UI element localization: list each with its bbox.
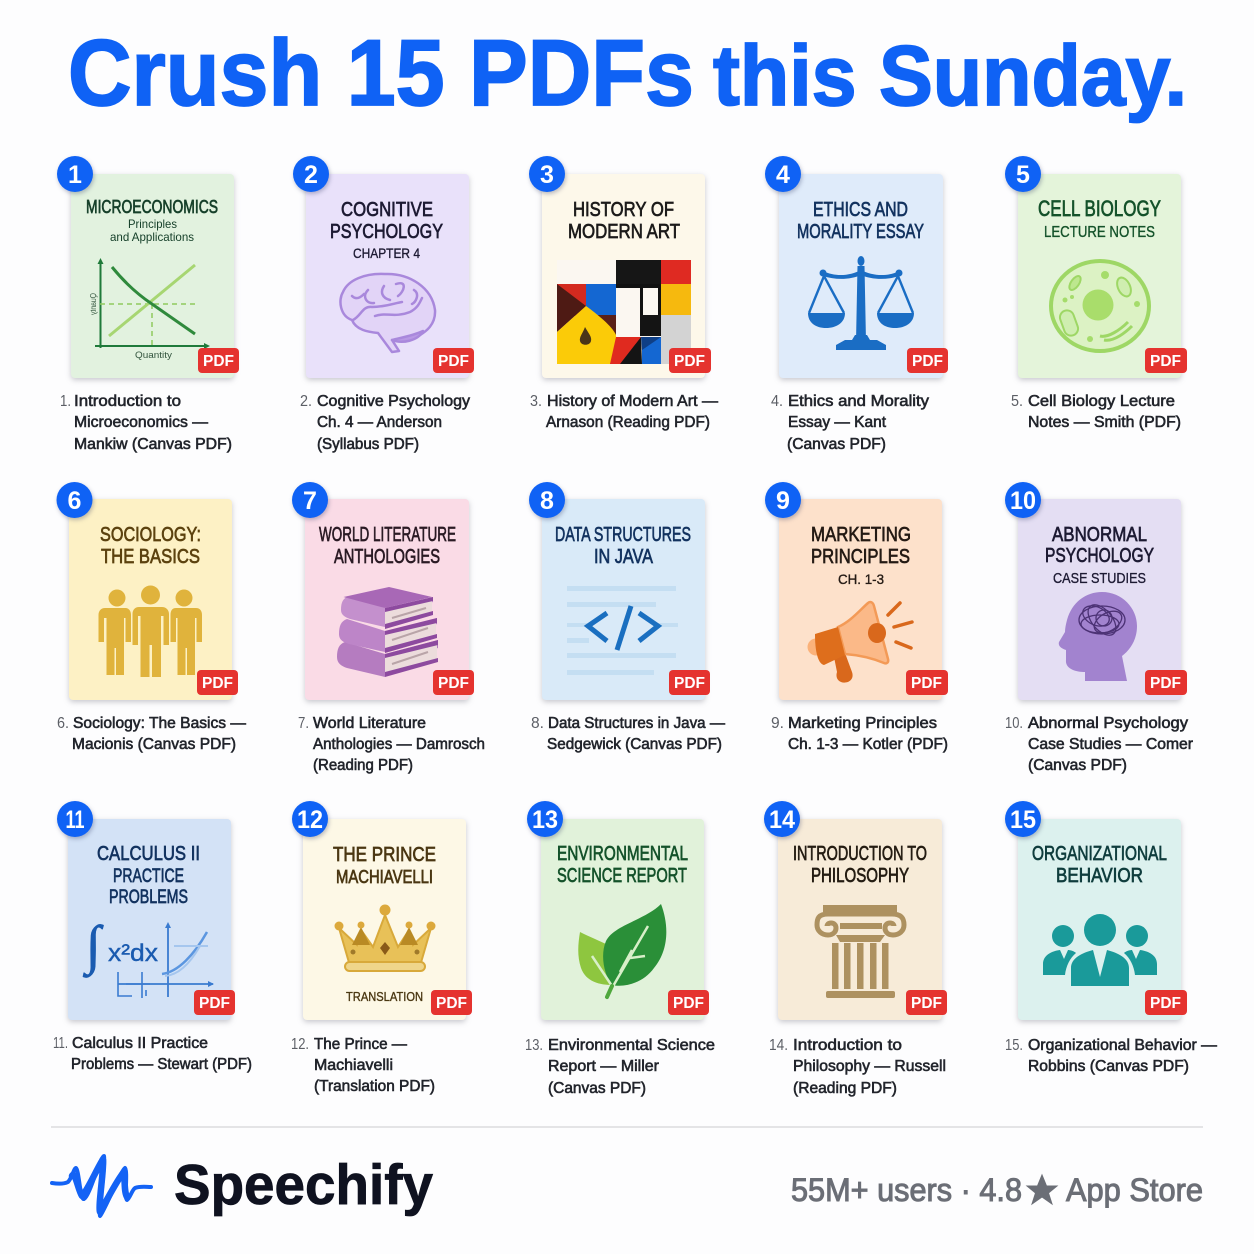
cover title: DATA STRUCTURES: [555, 523, 691, 546]
title: this Sunday.: [713, 29, 1187, 124]
card 2: cognitive psychology: [293, 156, 474, 453]
caption: 7.: [298, 715, 309, 732]
number badge: [529, 156, 565, 192]
caption: (Reading PDF): [313, 757, 413, 774]
caption: Mankiw (Canvas PDF): [74, 436, 232, 453]
caption: [57, 715, 246, 753]
number badge: [765, 156, 801, 192]
caption: Cell Biology Lecture: [1028, 393, 1175, 410]
cover title: BEHAVIOR: [1056, 864, 1143, 887]
icon: scales of justice: [808, 256, 914, 350]
caption: [769, 1037, 946, 1097]
number badge: [1005, 156, 1041, 192]
pdf tag: [906, 670, 948, 695]
pdf tag: PDF: [673, 995, 704, 1012]
number badge: 8: [540, 487, 554, 515]
cover: [71, 174, 234, 378]
caption: 10.: [1005, 715, 1023, 732]
cover title: [555, 523, 691, 568]
caption: [1005, 1037, 1217, 1075]
icon: calculus formula and graph: [83, 915, 214, 998]
cover title: MODERN ART: [568, 220, 680, 243]
cover: [69, 499, 232, 700]
caption: 14.: [769, 1037, 788, 1054]
icon: team of people: [1043, 914, 1157, 986]
card 14: introduction to philosophy: [764, 801, 947, 1097]
number badge: 2: [304, 161, 318, 189]
number badge: [1005, 801, 1041, 837]
cover title: THE PRINCE: [333, 843, 436, 866]
icon: supply and demand chart: Quantity: [135, 350, 172, 361]
caption: [1011, 393, 1181, 431]
icon: brain: [340, 274, 435, 352]
cover: [1018, 819, 1181, 1020]
icon: calculus formula and graph: x²dx: [108, 940, 158, 967]
pdf tag: [198, 348, 239, 373]
caption: 13.: [525, 1037, 543, 1054]
caption: 2.: [300, 393, 312, 410]
card 15: organizational behavior: [1005, 801, 1217, 1075]
cover title: [1045, 523, 1154, 587]
caption: 11.: [53, 1035, 68, 1052]
footer stats: App Store: [1066, 1172, 1203, 1208]
caption: [771, 393, 929, 453]
caption: Machiavelli: [314, 1057, 393, 1074]
pdf tag: [1145, 348, 1187, 373]
caption: Sedgewick (Canvas PDF): [547, 736, 722, 753]
caption: Notes — Smith (PDF): [1028, 414, 1181, 431]
caption: 5.: [1011, 393, 1023, 410]
caption: Ch. 4 — Anderson: [317, 414, 442, 431]
caption: Introduction to: [793, 1037, 902, 1054]
caption: Ch. 1-3 — Kotler (PDF): [788, 736, 948, 753]
cover title: COGNITIVE: [341, 198, 433, 221]
caption: Report — Miller: [548, 1058, 660, 1075]
cover: [779, 174, 943, 378]
icon: three people: [98, 586, 202, 677]
number badge: [764, 801, 800, 837]
caption: Robbins (Canvas PDF): [1028, 1058, 1189, 1075]
number badge: 14: [769, 806, 795, 834]
number badge: 7: [303, 487, 317, 515]
caption: The Prince —: [314, 1036, 407, 1053]
cover: [779, 499, 942, 700]
number badge: [527, 801, 563, 837]
cover title: MORALITY ESSAY: [797, 220, 924, 243]
cover title: WORLD LITERATURE: [319, 523, 456, 546]
caption: 8.: [531, 715, 544, 732]
caption: [298, 715, 485, 774]
caption: Calculus II Practice: [72, 1035, 208, 1052]
card 11: calculus ii: [53, 801, 252, 1073]
pdf tag: [431, 990, 472, 1015]
cover title: PSYCHOLOGY: [330, 220, 443, 243]
cover title: CH. 1-3: [838, 571, 884, 587]
title: [68, 20, 1187, 125]
card 9: marketing principles: [765, 482, 948, 753]
card 12: the prince: [291, 801, 472, 1095]
caption: 4.: [771, 393, 783, 410]
caption: [60, 393, 232, 453]
caption: Ethics and Morality: [788, 393, 929, 410]
number badge: [56, 482, 92, 518]
card 3: history of modern art: [529, 156, 718, 431]
pdf tag: PDF: [912, 353, 943, 370]
caption: (Syllabus PDF): [317, 436, 419, 453]
cover title: [811, 523, 911, 587]
card 6: sociology: [56, 482, 246, 753]
cover title: CHAPTER 4: [353, 245, 420, 261]
caption: (Canvas PDF): [548, 1080, 646, 1097]
pdf tag: [906, 990, 947, 1015]
card 8: data structures: [529, 482, 725, 753]
icon: greek column: [817, 905, 904, 998]
cover title: HISTORY OF: [573, 198, 674, 221]
icon: calculus formula and graph: ∫: [83, 915, 104, 978]
caption: (Canvas PDF): [787, 436, 886, 453]
caption: Problems — Stewart (PDF): [71, 1056, 252, 1073]
caption: History of Modern Art —: [547, 393, 718, 410]
cover title: [333, 843, 436, 1004]
cover title: [330, 198, 443, 261]
caption: 9.: [771, 715, 784, 732]
number badge: 12: [297, 806, 323, 834]
pdf tag: PDF: [438, 353, 469, 370]
pdf tag: [197, 670, 238, 695]
pdf tag: PDF: [202, 675, 233, 692]
pdf tag: [1145, 990, 1187, 1015]
number badge: [57, 156, 93, 192]
number badge: 9: [776, 487, 790, 515]
caption: (Canvas PDF): [1028, 757, 1127, 774]
caption: 12.: [291, 1036, 309, 1053]
caption: World Literature: [313, 715, 426, 732]
caption: [771, 715, 948, 753]
caption: Microeconomics —: [74, 414, 208, 431]
pdf tag: [669, 670, 710, 695]
cover title: MARKETING: [811, 523, 911, 546]
number badge: [57, 801, 93, 837]
card 13: environmental science: [525, 801, 715, 1097]
pdf tag: [1145, 670, 1187, 695]
caption: [531, 715, 725, 753]
cover title: PRACTICE: [113, 866, 184, 887]
cover title: MICROECONOMICS: [86, 197, 218, 217]
number badge: [293, 156, 329, 192]
cover title: [797, 198, 924, 243]
icon: leaves: [578, 904, 666, 997]
icon: head with tangled thoughts: [1059, 592, 1137, 681]
caption: Environmental Science: [548, 1037, 715, 1054]
cover: [778, 819, 942, 1020]
pdf tag: PDF: [1150, 675, 1181, 692]
cover title: CASE STUDIES: [1053, 570, 1146, 587]
pdf tag: [194, 990, 235, 1015]
pdf tag: PDF: [199, 995, 230, 1012]
caption: [530, 393, 718, 431]
pdf tag: [907, 348, 948, 373]
number badge: 11: [66, 806, 85, 834]
caption: Organizational Behavior —: [1028, 1037, 1217, 1054]
cover title: THE BASICS: [101, 545, 200, 568]
card 5: cell biology: [1005, 156, 1187, 431]
cover title: ANTHOLOGIES: [334, 545, 440, 568]
cover title: [319, 523, 456, 568]
caption: 3.: [530, 393, 542, 410]
caption: [53, 1035, 252, 1073]
footer brand name: Speechify: [174, 1153, 433, 1217]
cover: [542, 174, 705, 378]
cover: [303, 819, 466, 1020]
caption: Essay — Kant: [788, 414, 887, 431]
number badge: 4: [776, 161, 790, 189]
icon: supply and demand chart: [89, 258, 210, 361]
cover title: PSYCHOLOGY: [1045, 544, 1154, 567]
cover title: PRINCIPLES: [811, 545, 910, 568]
footer stats: 55M+ users · 4.8: [791, 1172, 1022, 1208]
card 7: world literature: [292, 482, 485, 774]
card 4: ethics and morality: [765, 156, 948, 453]
cover title: ABNORMAL: [1052, 523, 1147, 546]
cover: [1018, 499, 1181, 700]
pdf tag: PDF: [436, 995, 467, 1012]
caption: [291, 1036, 435, 1095]
number badge: [292, 801, 328, 837]
number badge: [1005, 482, 1041, 518]
cover title: PHILOSOPHY: [811, 864, 909, 887]
icon: cell: [1051, 261, 1149, 351]
number badge: 1: [68, 161, 82, 189]
caption: 15.: [1005, 1037, 1023, 1054]
caption: Cognitive Psychology: [317, 393, 470, 410]
cover title: [100, 523, 201, 568]
footer stats: [791, 1172, 1203, 1208]
caption: Sociology: The Basics —: [73, 715, 246, 732]
caption: [525, 1037, 715, 1097]
caption: Macionis (Canvas PDF): [72, 736, 236, 753]
cover title: PROBLEMS: [109, 887, 188, 908]
icon: stack of books: [337, 587, 438, 677]
icon: supply and demand chart: Quanty: [89, 293, 98, 315]
caption: 1.: [60, 393, 71, 410]
caption: Case Studies — Comer: [1028, 736, 1194, 753]
pdf tag: [433, 348, 474, 373]
cover title: [1032, 842, 1167, 887]
title: Crush 15 PDFs: [68, 20, 694, 125]
cover title: [1038, 196, 1161, 241]
cover title: INTRODUCTION TO: [793, 842, 927, 865]
card 1: microeconomics: [57, 156, 239, 453]
caption: Data Structures in Java —: [548, 715, 725, 732]
caption: Arnason (Reading PDF): [546, 414, 710, 431]
cover title: Principles: [128, 217, 177, 231]
number badge: 15: [1010, 806, 1036, 834]
pdf tag: [668, 990, 709, 1015]
caption: [300, 393, 470, 453]
cover title: ETHICS AND: [813, 198, 908, 221]
pdf tag: PDF: [1150, 353, 1181, 370]
icon: abstract art grid: [557, 260, 691, 364]
pdf tag: PDF: [674, 675, 705, 692]
caption: Anthologies — Damrosch: [313, 736, 485, 753]
cover title: SCIENCE REPORT: [557, 864, 687, 887]
number badge: [292, 482, 328, 518]
cover title: IN JAVA: [594, 545, 653, 568]
number badge: [529, 482, 565, 518]
cover title: ORGANIZATIONAL: [1032, 842, 1167, 865]
number badge: 3: [540, 161, 554, 189]
pdf tag: PDF: [1150, 995, 1181, 1012]
cover: [541, 819, 704, 1020]
cover title: MACHIAVELLI: [336, 867, 433, 887]
cover title: [557, 842, 688, 887]
pdf tag: PDF: [911, 995, 942, 1012]
cover title: SOCIOLOGY:: [100, 523, 201, 546]
number badge: 5: [1016, 161, 1030, 189]
caption: 6.: [57, 715, 69, 732]
pdf tag: PDF: [438, 675, 469, 692]
cover title: [793, 842, 927, 887]
cover: [305, 499, 469, 700]
cover title: ENVIRONMENTAL: [557, 842, 688, 865]
cover title: TRANSLATION: [346, 989, 423, 1004]
cover title: [86, 197, 218, 244]
number badge: 10: [1010, 487, 1036, 515]
pdf tag: PDF: [203, 353, 234, 370]
footer logo: speechify wave: [52, 1156, 151, 1216]
pdf tag: PDF: [674, 353, 705, 370]
number badge: [765, 482, 801, 518]
icon: crown: [334, 904, 436, 971]
caption: Introduction to: [74, 393, 181, 410]
number badge: 6: [68, 487, 81, 515]
icon: megaphone: [808, 602, 912, 683]
cover title: CELL BIOLOGY: [1038, 196, 1161, 221]
caption: [1005, 715, 1194, 774]
caption: Marketing Principles: [788, 715, 937, 732]
pdf tag: [433, 670, 474, 695]
cover title: [568, 198, 680, 243]
cover title: LECTURE NOTES: [1044, 224, 1155, 241]
icon: star: [1027, 1175, 1057, 1204]
card 10: abnormal psychology: [1005, 482, 1194, 774]
cover title: CALCULUS II: [97, 842, 200, 865]
caption: (Reading PDF): [793, 1080, 897, 1097]
cover: [1018, 174, 1181, 378]
icon: code symbol: [567, 586, 678, 675]
cover: [542, 499, 705, 700]
caption: Philosophy — Russell: [793, 1058, 946, 1075]
pdf tag: [669, 348, 711, 373]
pdf tag: PDF: [911, 675, 942, 692]
cover title: [97, 842, 200, 908]
cover title: and Applications: [110, 230, 194, 244]
cover: [68, 819, 231, 1020]
cover: [306, 174, 469, 378]
number badge: 13: [532, 806, 558, 834]
caption: Abnormal Psychology: [1028, 715, 1188, 732]
caption: (Translation PDF): [314, 1078, 435, 1095]
